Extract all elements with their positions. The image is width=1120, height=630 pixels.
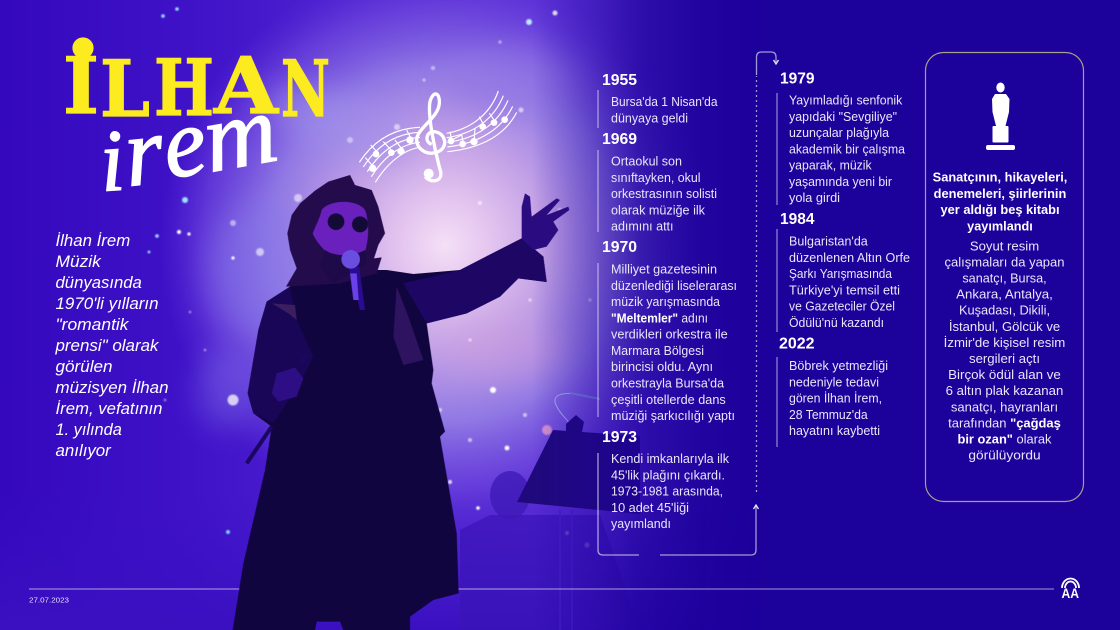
treble clef: [417, 94, 445, 181]
1955 entry: Bursa'da 1 Nisan'da: [611, 94, 718, 109]
1969 entry: [598, 131, 717, 234]
1969 entry: orkestrasının solisti: [611, 186, 717, 201]
1970 entry: çeşitli otellerde dans: [611, 392, 726, 407]
hand raised: [522, 193, 569, 250]
beard shadow: [320, 250, 367, 283]
title: İrem: i: [97, 113, 127, 211]
1970 entry: müzik yarışmasında: [611, 294, 721, 309]
title: İlhan: [63, 38, 330, 135]
1970 entry: düzenlediği liselerarası: [611, 278, 737, 293]
card body text: Soyut resim: [970, 238, 1039, 253]
card heading: Sanatçının, hikayeleri,: [933, 170, 1067, 184]
coat: [233, 238, 547, 630]
title: İlhan: H: [154, 43, 214, 134]
intro text: Müzik: [56, 252, 102, 271]
1973 entry: 1973-1981 arasında,: [611, 484, 723, 499]
title: İlhan: N: [281, 44, 330, 135]
1979 entry: yola girdi: [789, 190, 840, 205]
singer silhouette: [233, 175, 569, 630]
icon: AA logo: [1062, 578, 1079, 601]
1973 entry: 1973: [602, 429, 637, 446]
1984 entry: [777, 211, 910, 332]
intro text: İlhan İrem: [56, 231, 130, 250]
card heading: denemeleri, şiirlerinin: [934, 186, 1066, 201]
card body text: sanatçı, hayranları: [951, 399, 1058, 414]
card body text: [944, 238, 1065, 463]
1973 entry: [602, 429, 730, 531]
card heading: yer aldığı beş kitabı: [940, 202, 1060, 217]
1973 entry: 45'lik plağını çıkardı.: [611, 467, 725, 482]
1984 entry: Bulgaristan'da: [789, 234, 869, 248]
intro text: müzisyen İlhan: [56, 378, 168, 397]
1970 entry: Milliyet gazetesinin: [611, 262, 717, 276]
card body text: çalışmaları da yapan: [944, 254, 1064, 269]
card body text: 6 altın plak kazanan: [946, 383, 1063, 398]
title: İrem: m: [195, 75, 285, 194]
1979 entry: akademik bir çalışma: [789, 141, 906, 156]
icon: music staff and treble clef: [359, 91, 517, 182]
1970 entry: Marmara Bölgesi: [611, 343, 704, 358]
2022 entry: hayatını kaybetti: [789, 423, 880, 438]
arm shade: [403, 238, 547, 323]
2022 entry: nedeniyle tedavi: [789, 374, 879, 389]
2022 entry: Böbrek yetmezliği: [789, 358, 888, 373]
icon: award statuette: [986, 82, 1015, 150]
1970 entry: orkestrayla Bursa'da: [611, 376, 725, 390]
timeline column 1: [598, 72, 737, 531]
1973 entry: Kendi imkanlarıyla ilk: [611, 451, 730, 466]
card heading: yayımlandı: [967, 218, 1033, 234]
1970 entry: verdikleri orkestra ile: [611, 327, 728, 342]
1984 entry: 1984: [780, 211, 815, 228]
title: İlhan: A: [213, 41, 280, 132]
date: 27.07.2023: [29, 596, 69, 604]
title: İrem: r: [119, 96, 169, 208]
1979 entry: yaşamında yeni bir: [789, 174, 893, 189]
card body text: Kuşadası, Dikili,: [959, 303, 1050, 318]
2022 entry: 28 Temmuz'da: [789, 407, 869, 422]
1970 entry: 1970: [602, 239, 637, 256]
1970 entry: birincisi oldu. Aynı: [611, 359, 713, 374]
1984 entry: Şarkı Yarışmasında: [789, 266, 893, 281]
1979 entry: uzunçalar plağıyla: [789, 125, 890, 140]
card body text: İstanbul, Gölcük ve: [949, 319, 1060, 334]
card body text: sanatçı, Bursa,: [962, 270, 1047, 286]
card body text: tarafından "çağdaş: [948, 415, 1061, 430]
holding hand and mic stand: [272, 367, 303, 402]
2022 entry: [777, 336, 888, 447]
scarf: [393, 287, 423, 365]
1955 entry: 1955: [602, 72, 637, 89]
1984 entry: ve Gazeteciler Özel: [789, 299, 895, 314]
1970 entry: müziği şarkıcılığı yaptı: [611, 408, 735, 423]
face: [313, 202, 368, 258]
card body text: sergileri açtı: [969, 351, 1040, 366]
sunglasses: [328, 213, 344, 230]
card heading: [933, 170, 1067, 234]
music stand: [460, 393, 640, 630]
background photo: galaxy: [0, 0, 760, 630]
intro text: anılıyor: [56, 441, 112, 460]
timeline column 2: [777, 70, 910, 447]
intro text: "romantik: [56, 315, 130, 334]
1973 entry: yayımlandı: [611, 516, 671, 531]
footer line: [29, 588, 1054, 590]
1979 entry: yapıdaki "Sevgiliye": [789, 109, 897, 124]
1969 entry: Ortaokul son: [611, 154, 682, 168]
intro text: 1. yılında: [56, 420, 122, 439]
1973 entry: 10 adet 45'liği: [611, 500, 689, 515]
title: İrem: e: [156, 87, 213, 200]
card body text: görülüyordu: [968, 448, 1041, 463]
1979 entry: 1979: [780, 70, 815, 88]
1979 entry: Yayımladığı senfonik: [789, 92, 903, 108]
1969 entry: olarak müziğe ilk: [611, 202, 706, 217]
1979 entry: [777, 70, 906, 205]
panel: books and art card: [926, 52, 1084, 502]
timeline connector arrows: [598, 52, 778, 555]
1969 entry: 1969: [602, 131, 637, 148]
1984 entry: düzenlenen Altın Orfe: [789, 250, 910, 265]
card body text: Birçok ödül alan ve: [948, 367, 1061, 382]
title: İlhan: İ: [63, 39, 99, 132]
1955 entry: [598, 72, 718, 128]
1955 entry: dünyaya geldi: [611, 110, 688, 125]
microphone: [348, 267, 365, 310]
card body text: Ankara, Antalya,: [956, 287, 1053, 302]
intro text: prensi" olarak: [55, 336, 160, 355]
intro text: [55, 231, 168, 460]
1969 entry: adımını attı: [611, 219, 674, 234]
title: İlhan: L: [100, 44, 150, 135]
intro text: görülen: [56, 357, 112, 376]
1969 entry: sınıftayken, okul: [611, 170, 700, 185]
2022 entry: 2022: [779, 336, 814, 352]
2022 entry: gören İlhan İrem,: [789, 391, 882, 406]
title: İrem: [97, 75, 285, 211]
1970 entry: [598, 239, 737, 423]
intro text: İrem, vefatının: [56, 399, 162, 418]
card body text: İzmir'de kişisel resim: [944, 335, 1065, 350]
card body text: bir ozan" olarak: [958, 432, 1052, 446]
intro text: dünyasında: [56, 273, 142, 292]
1970 entry: "Meltemler" adını: [611, 310, 708, 325]
1979 entry: yaparak, müzik: [789, 158, 872, 173]
1984 entry: Türkiye'yi temsil etti: [789, 282, 900, 297]
intro text: 1970'li yılların: [56, 294, 158, 313]
icon: AA logo: AA: [1062, 585, 1079, 601]
1984 entry: Ödülü'nü kazandı: [789, 315, 884, 330]
hair: [286, 175, 385, 287]
